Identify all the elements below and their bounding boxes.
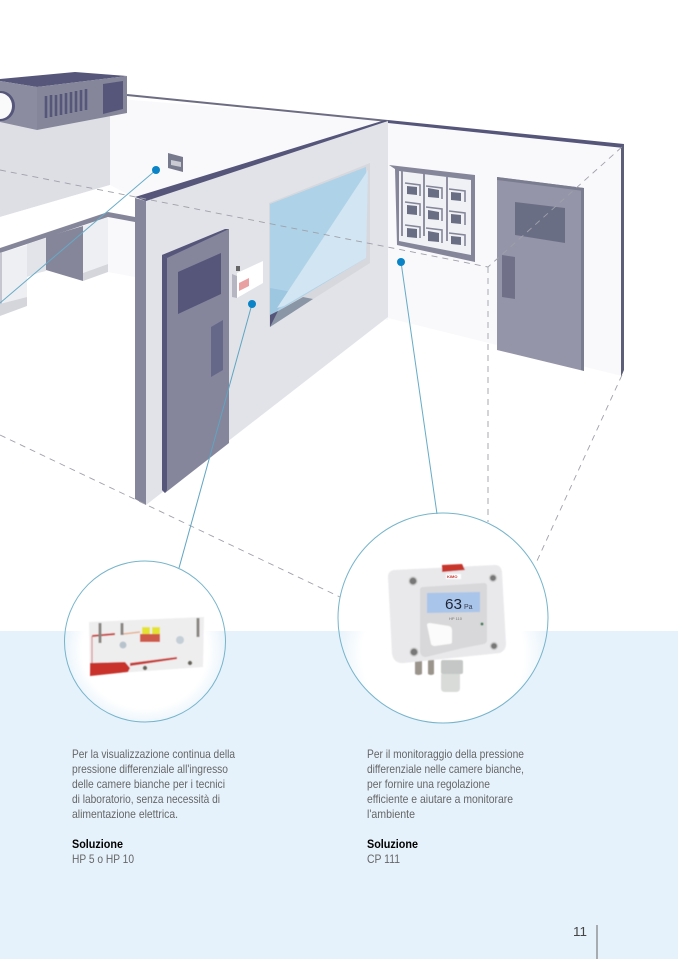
model label: HP 110 [449, 616, 463, 621]
red tag [442, 564, 465, 572]
wall end pillar [135, 198, 146, 505]
wall top edge [135, 120, 388, 201]
bench front edge [0, 212, 108, 253]
white glow right [344, 631, 542, 722]
observation window [269, 163, 370, 327]
connectors [415, 660, 434, 675]
cabinet light side [83, 217, 108, 273]
page rule [596, 925, 598, 959]
grey room column [0, 110, 110, 217]
right wall [388, 121, 622, 376]
description right: per fornire una regolazione [367, 777, 490, 791]
right door [497, 177, 584, 371]
wall instrument [232, 261, 263, 298]
fittings [98, 618, 200, 643]
door window [178, 253, 221, 314]
unit: Pa [464, 604, 473, 611]
glass lower shade [270, 288, 292, 316]
cable gland body [441, 674, 460, 692]
window frame [269, 163, 370, 327]
description right: differenziale nelle camere bianche, [367, 762, 524, 776]
description left: Per la visualizzazione continua della [72, 747, 235, 761]
description left [72, 747, 235, 821]
door window [515, 202, 565, 243]
yellow level marks [142, 627, 160, 634]
side wall [135, 120, 388, 505]
bench beam [108, 212, 135, 222]
panel cells [405, 183, 465, 246]
unit left face [0, 81, 37, 130]
leader line left [0, 170, 156, 303]
status led [480, 622, 484, 626]
wall device [168, 153, 183, 172]
description right [367, 747, 524, 821]
reading: 63 [445, 596, 462, 613]
leader line right [401, 262, 437, 514]
callout circle right [338, 513, 548, 723]
unit right face [37, 76, 127, 130]
door panel [502, 255, 515, 299]
laboratory bench [0, 185, 135, 316]
description left: di laboratorio, senza necessità di [72, 792, 220, 806]
text block left [72, 747, 235, 866]
screws [409, 574, 498, 656]
marker dot middle [248, 300, 256, 308]
back wall [108, 98, 388, 320]
pale tube [123, 632, 140, 634]
text block right [367, 747, 524, 866]
unit side panel [103, 81, 123, 114]
front plate [420, 583, 487, 657]
glass light [277, 170, 368, 308]
cabinet middle [27, 238, 46, 277]
description right: l'ambiente [367, 807, 415, 821]
air handling unit [0, 72, 127, 130]
duct opening [0, 91, 15, 121]
solution heading left: Soluzione [72, 837, 123, 851]
unit vents [46, 89, 86, 118]
manometer body [89, 617, 204, 675]
product: CP 111 transmitter [388, 564, 506, 692]
cabinet left side [0, 245, 27, 305]
window sill [270, 297, 313, 327]
CP 111 display text [445, 574, 473, 621]
description right: Per il monitoraggio della pressione [367, 747, 524, 761]
logo text: KIMO [447, 574, 457, 579]
glass dark [270, 167, 366, 316]
panel rails [402, 171, 447, 241]
illustration: clean room [0, 72, 624, 597]
bench top [0, 185, 135, 248]
red liquid reservoir [90, 662, 130, 676]
solution value right: CP 111 [367, 852, 400, 866]
marker dot right [397, 258, 405, 266]
soft button [427, 623, 452, 646]
right wall end edge [621, 144, 624, 377]
blue footer background [0, 631, 678, 959]
white glow left [68, 631, 222, 721]
description left: alimentazione elettrica. [72, 807, 178, 821]
description right: efficiente e aiutare a monitorare [367, 792, 513, 806]
right wall top edge [388, 120, 624, 148]
red liquid [239, 278, 249, 291]
red tube [130, 657, 177, 666]
product: HP differential manometer [89, 617, 204, 676]
panel body [389, 165, 475, 262]
housing [388, 565, 506, 663]
solution heading right: Soluzione [367, 837, 418, 851]
dashed perspective lines [0, 146, 623, 597]
marker dot left [152, 166, 160, 174]
solution value left: HP 5 o HP 10 [72, 852, 134, 866]
back wall top edge [127, 95, 388, 121]
cable gland nut [441, 660, 463, 674]
brand logo [446, 574, 461, 579]
red label [140, 634, 160, 642]
unit top [0, 72, 127, 87]
left door [162, 229, 229, 493]
description left: delle camere bianche per i tecnici [72, 777, 225, 791]
page number: 11 [573, 924, 587, 939]
callout circle left [64, 561, 226, 722]
door panel [211, 320, 223, 377]
upper red tube [92, 633, 115, 637]
description left: pressione differenziale all'ingresso [72, 762, 228, 776]
leader line middle [179, 304, 252, 568]
filter panel [389, 165, 475, 262]
LCD screen [427, 592, 480, 613]
cabinet dark side [46, 226, 83, 281]
